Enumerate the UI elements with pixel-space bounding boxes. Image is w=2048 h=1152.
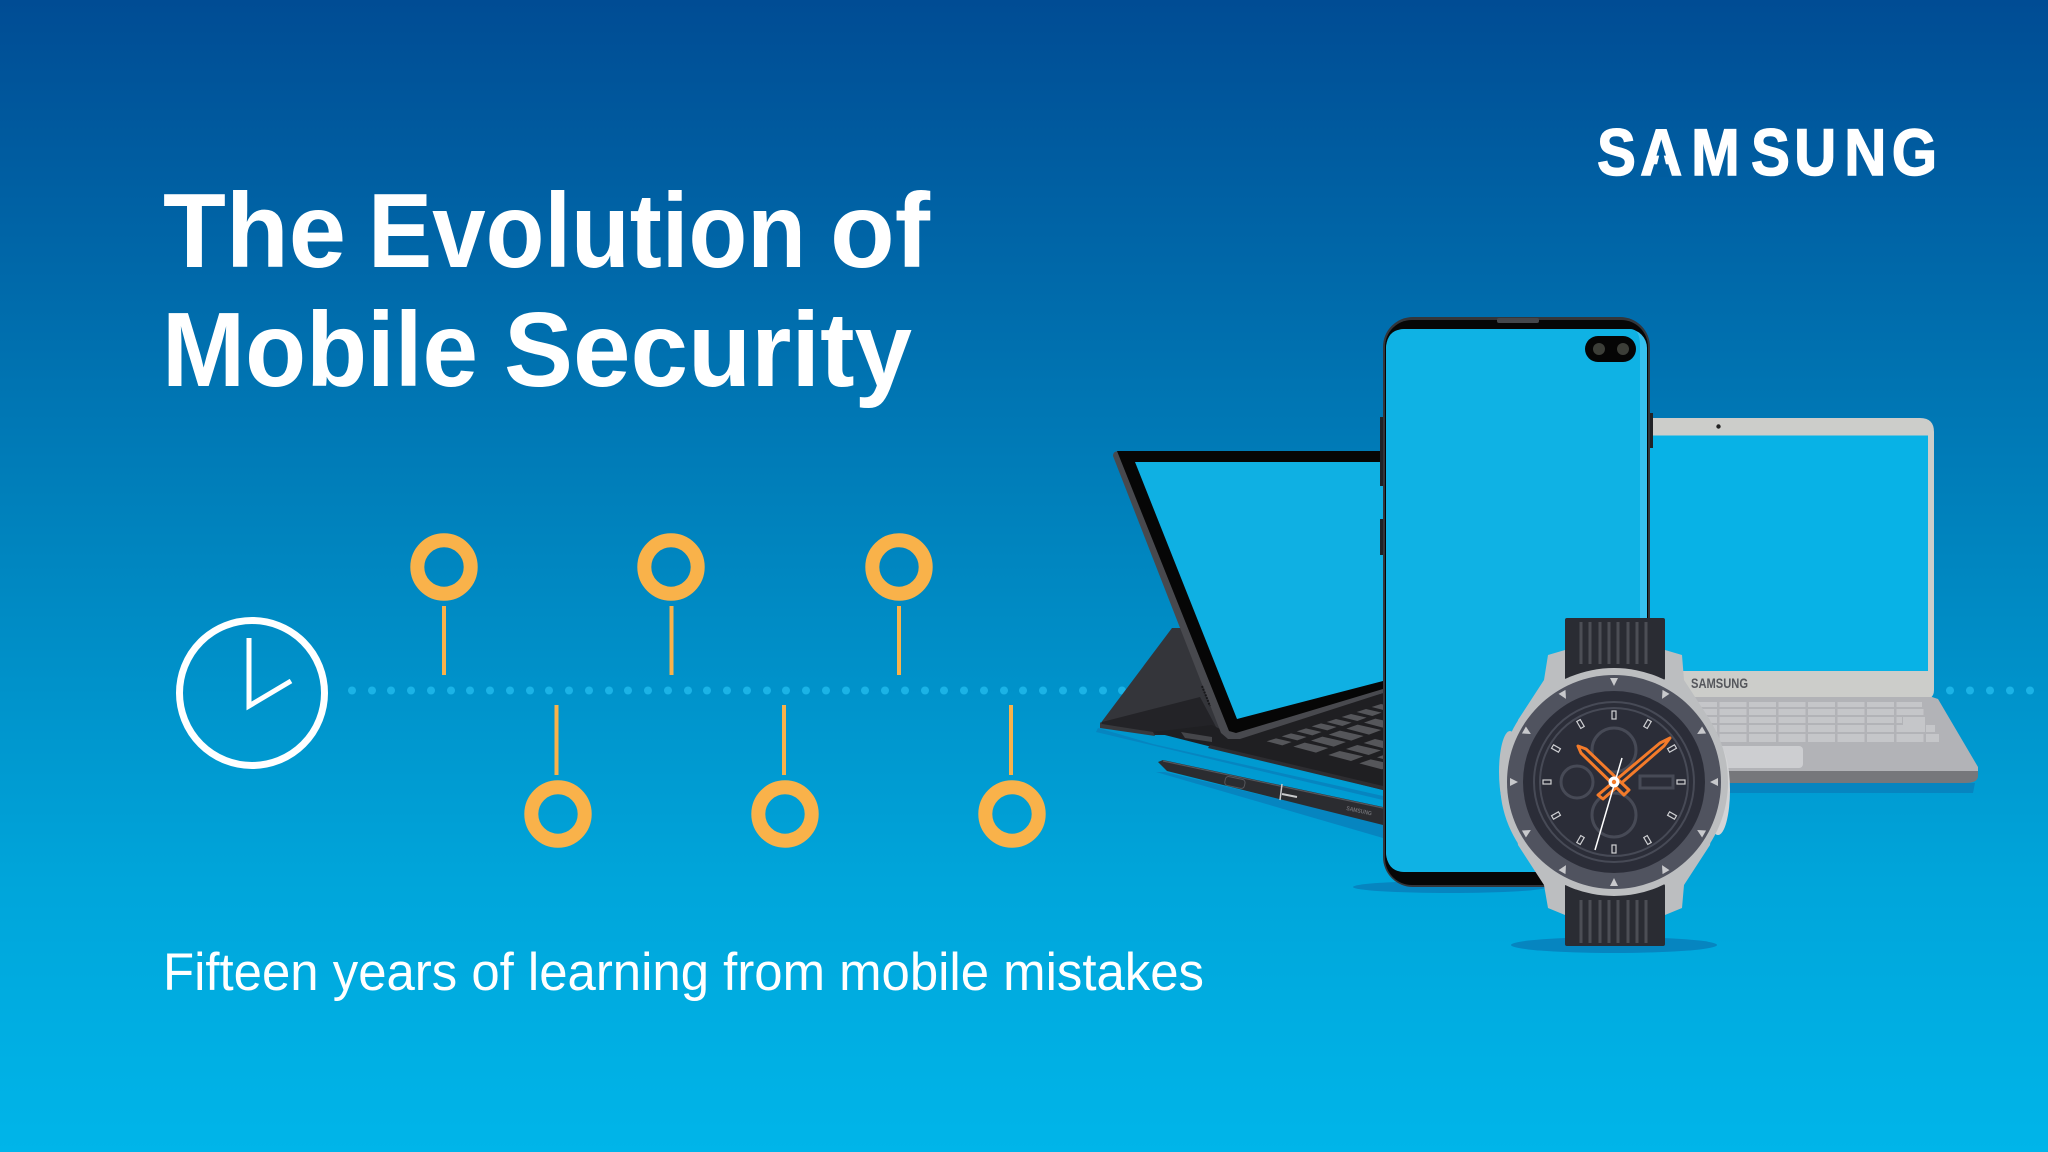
title: The <box>163 172 346 290</box>
timeline markers <box>417 540 1039 841</box>
title: Mobile <box>162 291 478 409</box>
watch bezel <box>1500 668 1728 896</box>
watch dial <box>1534 702 1694 862</box>
icon: clock <box>180 620 324 766</box>
title <box>162 172 931 409</box>
title: Evolution <box>368 172 806 290</box>
watch hands <box>1578 738 1670 850</box>
timeline dots <box>348 686 2034 694</box>
smartphone <box>1353 317 1653 893</box>
smartwatch <box>1499 618 1730 953</box>
stylus: SAMSUNG <box>1346 806 1373 817</box>
tablet with keyboard <box>1096 451 1412 800</box>
bezel triangles <box>1510 678 1718 886</box>
samsung logo: SAMSUNG <box>1597 117 1937 190</box>
stylus <box>1156 760 1383 838</box>
title: Security <box>504 291 912 409</box>
laptop: SAMSUNG <box>1691 675 1748 691</box>
watch case lugs <box>1499 650 1730 915</box>
laptop <box>1600 418 1978 793</box>
hour markers <box>1543 711 1685 853</box>
title: of <box>830 172 931 290</box>
keyboard keys <box>1267 704 1412 769</box>
watch straps <box>1565 618 1665 946</box>
subtitle: Fifteen years of learning from mobile mistakes <box>163 943 1204 1002</box>
